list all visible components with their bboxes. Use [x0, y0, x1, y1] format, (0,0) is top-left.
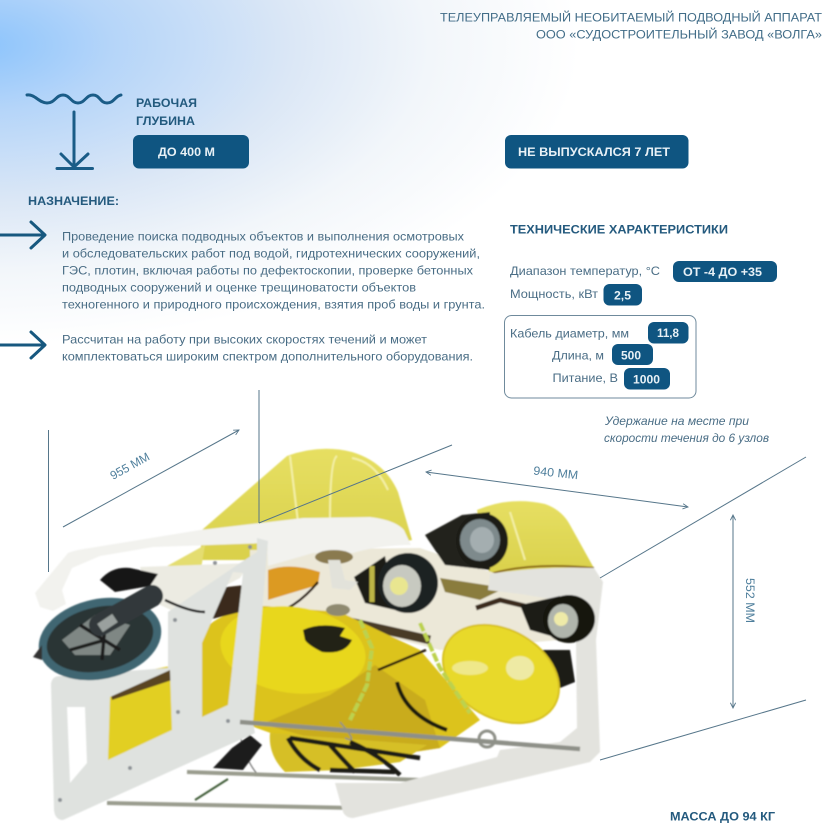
white right frame — [335, 568, 603, 818]
working depth label — [136, 96, 197, 128]
panel: cable specs — [504, 316, 696, 398]
spec: temperature range: Диапазон температур, °C — [510, 265, 660, 278]
dimension: 552 mm: 552 ММ — [743, 578, 757, 623]
title: ООО «СУДОСТРОИТЕЛЬНЫЙ ЗАВОД «ВОЛГА» — [536, 26, 822, 42]
green rope ties — [350, 620, 470, 720]
spec: temperature range: ОТ -4 ДО +35 — [683, 265, 762, 279]
rear yellow float — [160, 449, 412, 575]
note: station keeping: Удержание на месте при — [604, 415, 750, 428]
spec: power: Мощность, кВт — [510, 288, 599, 301]
title — [440, 10, 822, 42]
icon: working depth wave and arrow — [27, 95, 121, 168]
white upper frame — [35, 517, 411, 611]
right yellow disc — [425, 605, 577, 743]
text: purpose second item: комплектоваться широким спектром дополнительного оборудования. — [62, 350, 473, 364]
interior plate — [250, 548, 575, 650]
central yellow body — [195, 585, 480, 757]
working depth label: РАБОЧАЯ — [136, 96, 197, 110]
panel: cable specs: Кабель диаметр, мм — [510, 328, 629, 340]
main steel rod — [240, 722, 580, 749]
sonar unit — [33, 568, 205, 686]
text: purpose first item: техногенного и природного происхождения, взятия проб воды и грунта. — [62, 298, 485, 312]
title: ТЕЛЕУПРАВЛЯЕМЫЙ НЕОБИТАЕМЫЙ ПОДВОДНЫЙ АППАРАТ — [440, 10, 822, 24]
spec: temperature range — [510, 261, 777, 282]
panel: cable specs: Питание, В — [552, 372, 618, 385]
working depth label: ГЛУБИНА — [136, 114, 195, 128]
lower skid rods — [107, 772, 450, 808]
heading: purpose: НАЗНАЧЕНИЕ: — [28, 194, 119, 208]
dimension: 955 mm — [63, 430, 239, 527]
spec: power — [510, 284, 642, 306]
heading: technical specifications: ТЕХНИЧЕСКИЕ ХАРАКТЕРИСТИКИ — [510, 222, 728, 236]
panel: cable specs: 1000 — [633, 372, 660, 386]
note: station keeping: скорости течения до 6 узлов — [604, 432, 769, 445]
panel: cable specs: 500 — [621, 348, 641, 362]
ROV photo illustration — [33, 449, 603, 820]
text: purpose first item: Проведение поиска подводных объектов и выполнения осмотровых — [62, 230, 464, 244]
lower yellow tanks and cables — [213, 733, 427, 775]
left yellow body — [100, 665, 180, 770]
badge: not produced — [505, 135, 688, 168]
text: purpose second item — [62, 334, 473, 364]
lamp: right — [520, 595, 595, 643]
text: purpose second item: Рассчитан на работу при высоких скоростях течений и может — [62, 334, 428, 346]
arrow: purpose first item — [0, 222, 45, 248]
white plate behind sonar — [140, 563, 250, 612]
badge: depth value: ДО 400 М — [158, 145, 215, 159]
dimension: 940 mm — [426, 464, 688, 507]
mass label: МАССА ДО 94 КГ — [670, 810, 775, 824]
arrow: purpose second item — [0, 332, 45, 358]
text: purpose first item: и обследовательских работ под водой, гидротехнических сооружений, — [62, 248, 480, 260]
badge: not produced: НЕ ВЫПУСКАЛСЯ 7 ЛЕТ — [518, 145, 671, 159]
panel: cable specs: Длина, м — [552, 350, 604, 362]
dimension: 940 mm: 940 ММ — [533, 464, 579, 482]
right yellow float — [477, 501, 595, 578]
text: purpose first item: ГЭС, плотин, включая работы по дефектоскопии, проверке бетонных — [62, 264, 473, 278]
dimension: 955 mm: 955 ММ — [108, 450, 152, 483]
panel: cable specs: 11,8 — [657, 326, 679, 340]
note: station keeping — [604, 415, 769, 445]
dimension guide lines — [48, 390, 806, 760]
mount bracket — [315, 550, 358, 616]
text: purpose first item: подводных сооружений и оценке трещиноватости объектов — [62, 282, 416, 294]
lamp: middle — [354, 553, 438, 613]
text: purpose first item — [62, 230, 485, 312]
front left frame — [51, 538, 268, 820]
spec: power: 2,5 — [614, 288, 631, 302]
lamp: upper — [425, 512, 508, 570]
badge: depth value — [133, 135, 249, 168]
